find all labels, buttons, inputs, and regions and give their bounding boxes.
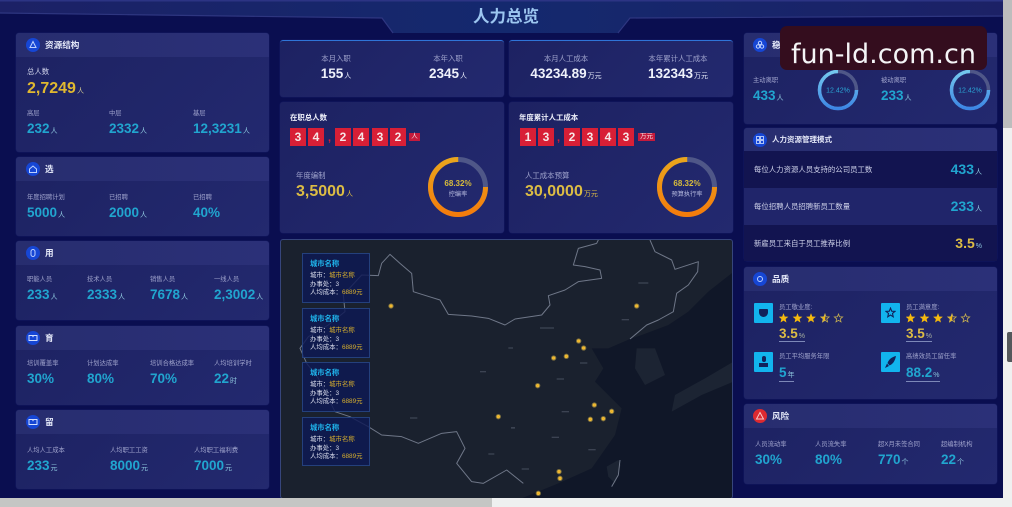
donut: 控编率 (428, 157, 488, 217)
stat: 年度招聘计划 (27, 194, 65, 220)
stat: 本月入职 (321, 54, 351, 81)
stat: 计划达成率: 80% (87, 371, 114, 386)
heading: 在职总人数: 在职总人数 (290, 113, 327, 122)
stat: 人工成本预算: 30,0000万元 (525, 183, 598, 200)
stat: 人员流动率 (755, 439, 786, 469)
icon: chess piece square (754, 352, 773, 372)
row: 新雇员工来自于员工推荐比例: 新雇员工来自于员工推荐比例 (754, 239, 850, 248)
stat: 本月人工成本 (530, 54, 602, 81)
stat: 一线人员: 一线人员 (214, 276, 239, 283)
stat: 中层: 中层 (109, 110, 122, 117)
city card 2: 城市：城市名称 (310, 327, 355, 334)
stat: 一线人员 (214, 276, 263, 302)
stat: 人均职工福利费: 7000元 (194, 458, 232, 473)
metric: 员工敬业度 (779, 303, 869, 347)
digit counter: 3 (623, 130, 629, 144)
stat: 人均职工工资 (110, 446, 148, 473)
stat: 被动离职: 被动离职 (881, 77, 906, 84)
donut: 预算执行率: 68.32% (673, 179, 701, 188)
donut: 预算执行率: 预算执行率 (672, 190, 702, 198)
stat: 年度招聘计划: 年度招聘计划 (27, 194, 65, 201)
stat: 主动离职 (753, 76, 784, 103)
icon: select (26, 162, 40, 176)
metric: 高绩效员工留任率: 高绩效员工留任率 (906, 353, 956, 360)
heading: 选: 选 (45, 164, 54, 174)
stat: 高层: 高层 (27, 110, 40, 117)
stat: 技术人员 (87, 276, 125, 302)
metric: 员工平均服务年限 (779, 352, 869, 384)
stat: 技术人员: 技术人员 (87, 276, 112, 283)
panel: 育 (16, 326, 269, 405)
metric: 高绩效员工留任率 (906, 352, 996, 384)
stat: 本年入职: 本年入职 (433, 54, 463, 63)
stat: 人均人工成本: 233元 (27, 458, 58, 473)
stat: 销售人员: 7678人 (150, 287, 188, 302)
icon: stability (753, 38, 767, 52)
donut: 预算执行率 (657, 157, 717, 217)
stat: 技术人员: 2333人 (87, 287, 125, 302)
heading: 年度累计人工成本: 年度累计人工成本 (519, 113, 578, 122)
panel: 年度累计人工成本 (509, 102, 733, 233)
stat: 人均职工工资: 8000元 (110, 458, 148, 473)
stat: 本年入职: 2345人 (429, 66, 467, 81)
city card 3: 人均成本：6889元 (310, 398, 363, 405)
stat: 超X月未签合同 (878, 439, 920, 469)
stat: 已招聘 percent (193, 194, 220, 220)
stat: 中层 (109, 110, 147, 136)
row: 每位人力资源人员支持的公司员工数: 每位人力资源人员支持的公司员工数 (754, 165, 872, 174)
stat: 超编制机构 (941, 439, 972, 469)
stat: 年度编制: 3,5000人 (296, 183, 353, 200)
stat: 超X月未签合同: 770个 (878, 452, 909, 467)
digit counter: 4 (605, 130, 611, 144)
stat: 职能人员: 职能人员 (27, 276, 52, 283)
stat: 销售人员 (150, 276, 188, 302)
stat: 计划达成率 (87, 360, 118, 386)
digit counter: , (328, 132, 331, 144)
icon: rocket square (881, 352, 900, 372)
stat: 主动离职: 主动离职 (753, 77, 778, 84)
stat: 基层: 12,3231人 (193, 121, 250, 136)
heading: 资源结构: 资源结构 (45, 40, 79, 50)
stat: 已招聘 count: 已招聘 (109, 194, 128, 201)
city card 1: 人均成本：6889元 (310, 289, 363, 296)
stat: 一线人员: 2,3002人 (214, 287, 263, 302)
heading: 人力资源管理模式: 人力资源管理模式 (772, 135, 832, 144)
stat: 已招聘 count: 2000人 (109, 205, 147, 220)
heading: 育: 育 (45, 333, 54, 343)
stat: 培训覆盖率: 30% (27, 371, 54, 386)
panel: monthly and yearly hires (280, 40, 504, 97)
row: 每位人力资源人员支持的公司员工数: 433人 (951, 161, 982, 177)
stat: 已招聘 count (109, 194, 147, 220)
digit counter (290, 128, 420, 146)
total headcount: 总人数 (27, 67, 49, 76)
metric: 高绩效员工留任率: 88.2% (906, 365, 940, 380)
stat: 人工成本预算 (525, 171, 598, 200)
icon: book (26, 331, 40, 345)
stat: 计划达成率: 计划达成率 (87, 360, 118, 367)
icon: crown square (754, 303, 773, 323)
stat: 人员流动率: 30% (755, 452, 782, 467)
stat: 已招聘 percent: 40% (193, 205, 220, 220)
stat: 本年入职 (429, 54, 467, 81)
digit counter: 2 (340, 130, 346, 144)
heading: 风险: 风险 (772, 411, 789, 421)
stat: 本月入职: 155人 (321, 66, 351, 81)
digit counter: 4 (358, 130, 364, 144)
stat: 人均人工成本: 人均人工成本 (27, 447, 65, 454)
stat: 中层: 2332人 (109, 121, 147, 136)
stat: 人员流失率 (815, 439, 846, 469)
digit counter: 3 (543, 130, 549, 144)
stat: 本年累计人工成本: 本年累计人工成本 (648, 54, 708, 63)
stat: 培训覆盖率 (27, 360, 58, 386)
stat: 人工成本预算: 人工成本预算 (525, 171, 569, 180)
donut: 控编率: 68.32% (444, 179, 472, 188)
star rating (906, 313, 972, 324)
stat: 职能人员: 233人 (27, 287, 58, 302)
icon: use (26, 246, 40, 260)
panel: 在职总人数 (280, 102, 504, 233)
donut: 主动离职率: 12.42% (826, 88, 850, 94)
city card 3: 城市名称 (310, 368, 339, 377)
stat: 人均培训学时: 人均培训学时 (214, 360, 252, 367)
stat: 基层: 基层 (193, 110, 206, 117)
stat: 年度编制: 年度编制 (296, 171, 326, 180)
stat: 培训合格达成率: 培训合格达成率 (150, 360, 194, 367)
page header band (0, 0, 1003, 34)
city card 3: 办事处：3 (310, 390, 339, 396)
panel: 风险 (744, 404, 997, 484)
panel: 资源结构 (16, 33, 269, 152)
row: 新雇员工来自于员工推荐比例: 3.5% (955, 235, 982, 251)
digit counter: 3 (587, 130, 593, 144)
watermark: fun-ld.com.cn (791, 39, 976, 70)
digit counter: 2 (569, 130, 575, 144)
stat: 本月人工成本: 43234.89万元 (530, 66, 602, 81)
stat: 人均培训学时: 22时 (214, 371, 237, 386)
stat: 培训合格达成率 (150, 360, 194, 386)
heading: 稳定性: 稳定性 (772, 40, 798, 50)
stat: 超编制机构: 22个 (941, 452, 964, 467)
city card 1 (302, 253, 370, 303)
panel: 用 (16, 241, 269, 320)
donut: 控编率: 控编率 (449, 190, 467, 198)
metric: 员工敬业度: 员工敬业度: (779, 304, 812, 311)
stat: 人均职工福利费 (194, 446, 238, 473)
digit counter: 3 (295, 130, 301, 144)
icon: mode (753, 133, 767, 147)
metric: 员工满意度: 员工满意度: (906, 304, 939, 311)
digit counter: 4 (313, 130, 319, 144)
stat: 高层 (27, 110, 58, 136)
city card 1: 城市：城市名称 (310, 272, 355, 279)
digit counter: 2 (395, 130, 401, 144)
donut: 被动离职率 (950, 70, 990, 110)
icon: structure (26, 38, 40, 52)
star rating (779, 313, 845, 324)
city card 4: 办事处：3 (310, 444, 339, 452)
stat: 超X月未签合同: 超X月未签合同 (878, 441, 920, 448)
stat: 年度编制 (296, 171, 353, 200)
heading: 用: 用 (45, 248, 54, 258)
row: 每位招聘人员招聘新员工数量: 233人 (951, 198, 982, 214)
stat: 本月入职: 本月入职 (321, 54, 351, 63)
digit counter: , (557, 132, 560, 144)
stat: 主动离职: 433人 (753, 88, 784, 103)
watermark (780, 26, 987, 70)
city card 3: 城市：城市名称 (310, 381, 355, 388)
stat: 人均人工成本 (27, 446, 65, 473)
city card 3 (302, 362, 370, 412)
metric: 员工满意度: 3.5% (906, 326, 932, 341)
stat: 年度招聘计划: 5000人 (27, 205, 65, 220)
panel: 选 (16, 157, 269, 236)
row: 每位招聘人员招聘新员工数量: 每位招聘人员招聘新员工数量 (754, 202, 850, 211)
city card 4: 人均成本：6889元 (310, 453, 363, 460)
city card 4: 城市名称 (310, 423, 339, 432)
panel: 稳定性 (744, 33, 997, 124)
heading: 留: 留 (45, 417, 54, 427)
stat: 被动离职 (881, 76, 912, 103)
icon: risk (753, 409, 767, 423)
stat: 人员流失率: 人员流失率 (815, 441, 846, 448)
panel: labour cost (509, 40, 733, 97)
panel: 品质 (744, 267, 997, 399)
city card 2: 办事处：3 (310, 336, 339, 342)
stat: 高层: 232人 (27, 121, 58, 136)
stat: 人均培训学时 (214, 360, 252, 386)
city card 4 (302, 417, 370, 466)
stat: 超编制机构: 超编制机构 (941, 441, 972, 448)
icon: star square (881, 303, 900, 323)
total headcount (27, 67, 84, 97)
city card 2 (302, 308, 370, 358)
stat: 人均职工福利费: 人均职工福利费 (194, 447, 238, 454)
stat: 培训合格达成率: 70% (150, 371, 177, 386)
stat: 培训覆盖率: 培训覆盖率 (27, 360, 58, 367)
stat: 本年累计人工成本: 132343万元 (648, 66, 708, 81)
panel: 留 (16, 410, 269, 489)
city card 2: 城市名称 (310, 314, 339, 323)
city card 1: 办事处：3 (310, 280, 339, 288)
icon: retain (26, 415, 40, 429)
digit counter: 3 (377, 130, 383, 144)
city card 2: 人均成本：6889元 (310, 344, 363, 351)
metric: 员工敬业度: 3.5% (779, 326, 805, 341)
row: 每位招聘人员招聘新员工数量 (744, 188, 997, 225)
stat: 职能人员 (27, 276, 58, 302)
total headcount: 2,7249人 (27, 80, 84, 97)
stat: 销售人员: 销售人员 (150, 276, 175, 283)
icon: quality (753, 272, 767, 286)
row: 每位人力资源人员支持的公司员工数 (744, 151, 997, 188)
donut: 主动离职率 (818, 70, 858, 110)
metric: 员工满意度 (906, 303, 996, 347)
stat: 基层 (193, 110, 250, 136)
heading: 品质: 品质 (772, 274, 789, 284)
metric: 员工平均服务年限: 5年 (779, 365, 795, 380)
stat: 人均职工工资: 人均职工工资 (110, 447, 148, 454)
stat: 人员流失率: 80% (815, 452, 842, 467)
title: 人力总览 (473, 8, 539, 26)
digit counter: 1 (525, 130, 531, 144)
stat: 本年累计人工成本 (648, 54, 708, 81)
panel: 人力资源管理模式 (744, 128, 997, 261)
map of China (300, 240, 732, 498)
stat: 已招聘 percent: 已招聘 (193, 194, 212, 201)
city card 4: 城市：城市名称 (310, 436, 355, 443)
metric: 员工平均服务年限: 员工平均服务年限 (779, 353, 829, 360)
city card 1: 城市名称 (310, 259, 339, 268)
stat: 被动离职: 233人 (881, 88, 912, 103)
row: 新雇员工来自于员工推荐比例 (744, 225, 997, 261)
digit counter: 人 (411, 133, 418, 140)
stat: 本月人工成本: 本月人工成本 (544, 54, 588, 63)
donut: 被动离职率: 12.42% (958, 88, 982, 94)
digit counter: 万元 (640, 133, 653, 140)
panel: map (280, 239, 733, 499)
stat: 人员流动率: 人员流动率 (755, 441, 786, 448)
digit counter (520, 128, 655, 146)
